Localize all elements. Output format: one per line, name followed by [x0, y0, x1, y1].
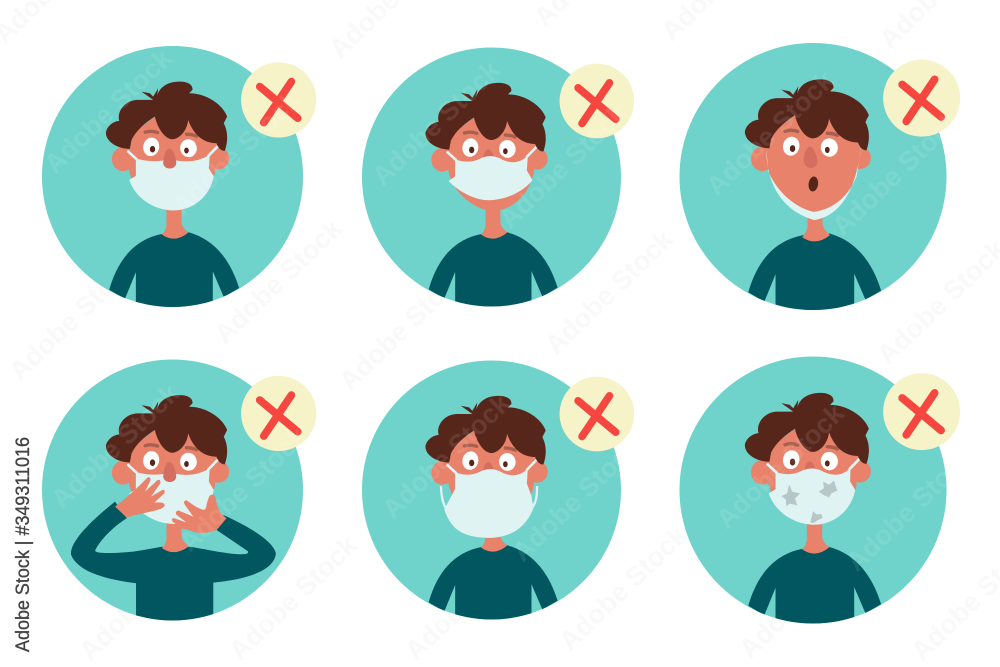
watermarks over the circles: Adobe Stock — [840, 440, 981, 577]
watermarks over the circles: Adobe Stock — [826, 104, 967, 241]
background watermarks: Adobe Stock — [539, 223, 680, 360]
background watermarks: Adobe Stock — [553, 519, 694, 656]
oversized mask — [441, 469, 537, 538]
watermarks over the circles: Adobe Stock — [493, 97, 634, 234]
background watermarks: Adobe Stock — [333, 259, 474, 396]
watermarks over the circles: Adobe Stock — [45, 377, 186, 514]
raised-arm shirt — [71, 502, 276, 627]
watermarks over the circles — [38, 42, 981, 577]
icon: cross badge — [560, 64, 634, 138]
watermarks over the circles: Adobe Stock — [366, 54, 507, 191]
background watermarks: Adobe Stock — [3, 249, 144, 386]
background watermarks: Adobe Stock — [223, 529, 364, 666]
mask with stains — [769, 468, 855, 525]
character — [425, 396, 558, 629]
watermarks over the circles: Adobe Stock — [506, 430, 647, 567]
icon: cross badge — [883, 60, 960, 137]
background watermarks: Adobe Stock — [208, 212, 349, 349]
panel: dirty mask — [679, 356, 960, 633]
watermarks over the circles: Adobe Stock — [38, 42, 179, 179]
watermarks over the circles: Adobe Stock — [166, 84, 307, 221]
character — [745, 393, 881, 633]
mask over mouth only — [449, 156, 532, 200]
character — [425, 83, 558, 316]
watermarks over the circles: Adobe Stock — [173, 420, 314, 557]
hands — [115, 477, 227, 533]
icon: cross badge — [560, 377, 634, 451]
mask under nose — [129, 155, 214, 210]
watermarks over the circles: Adobe Stock — [376, 387, 517, 524]
panel: mask on the chin — [679, 43, 960, 320]
character — [71, 395, 276, 627]
background watermarks: Adobe Stock — [73, 529, 214, 666]
watermarks over the circles: Adobe Stock — [710, 397, 851, 534]
open mouth — [808, 176, 818, 192]
icon: cross badge — [241, 376, 316, 451]
icon: cross badge — [883, 373, 960, 450]
panel: mask below the chin line, chin exposed — [362, 47, 634, 316]
panel: touching the mask with hands — [42, 359, 316, 627]
panel: mask too large — [362, 360, 634, 629]
background watermarks: Adobe Stock — [733, 527, 874, 664]
panel: mask below the nose — [42, 46, 316, 316]
character — [106, 82, 239, 316]
character — [745, 79, 881, 320]
icon: cross badge — [241, 62, 316, 138]
background watermarks: Adobe Stock — [399, 529, 540, 666]
mask on chin — [766, 145, 861, 220]
stock id caption: Adobe Stock | #349311016 — [13, 437, 34, 652]
watermarks over the circles: Adobe Stock — [700, 64, 841, 201]
